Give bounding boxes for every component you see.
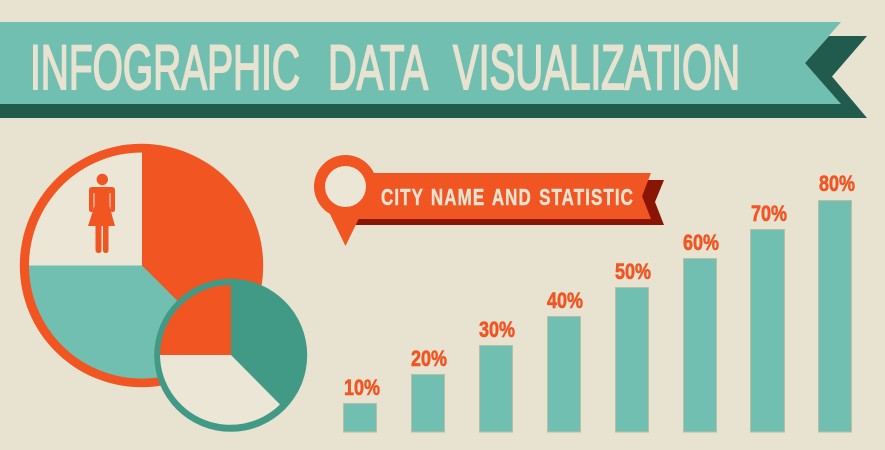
location pin with ribbon [314,155,664,246]
bar chart: 80% [819,171,855,196]
large pie chart [20,144,263,387]
bar chart: 60% [683,230,719,255]
icon: pin [314,155,377,246]
ribbon label: CITY NAME AND STATISTIC [381,184,634,210]
bar chart: 50% [615,259,651,284]
bar chart: 30% [479,317,515,342]
title: INFOGRAPHIC [30,33,300,103]
bar chart: 40% [547,288,583,313]
icon: woman [88,174,115,253]
title: DATA [328,33,428,103]
bar chart: 10% [344,375,380,400]
bar chart: 70% [751,201,787,226]
ribbon shadow [355,180,664,225]
title [30,33,740,103]
small pie chart [154,279,307,432]
title banner [0,22,867,118]
bar chart: 20% [411,346,447,371]
bar chart [344,171,855,432]
ribbon [355,173,651,219]
